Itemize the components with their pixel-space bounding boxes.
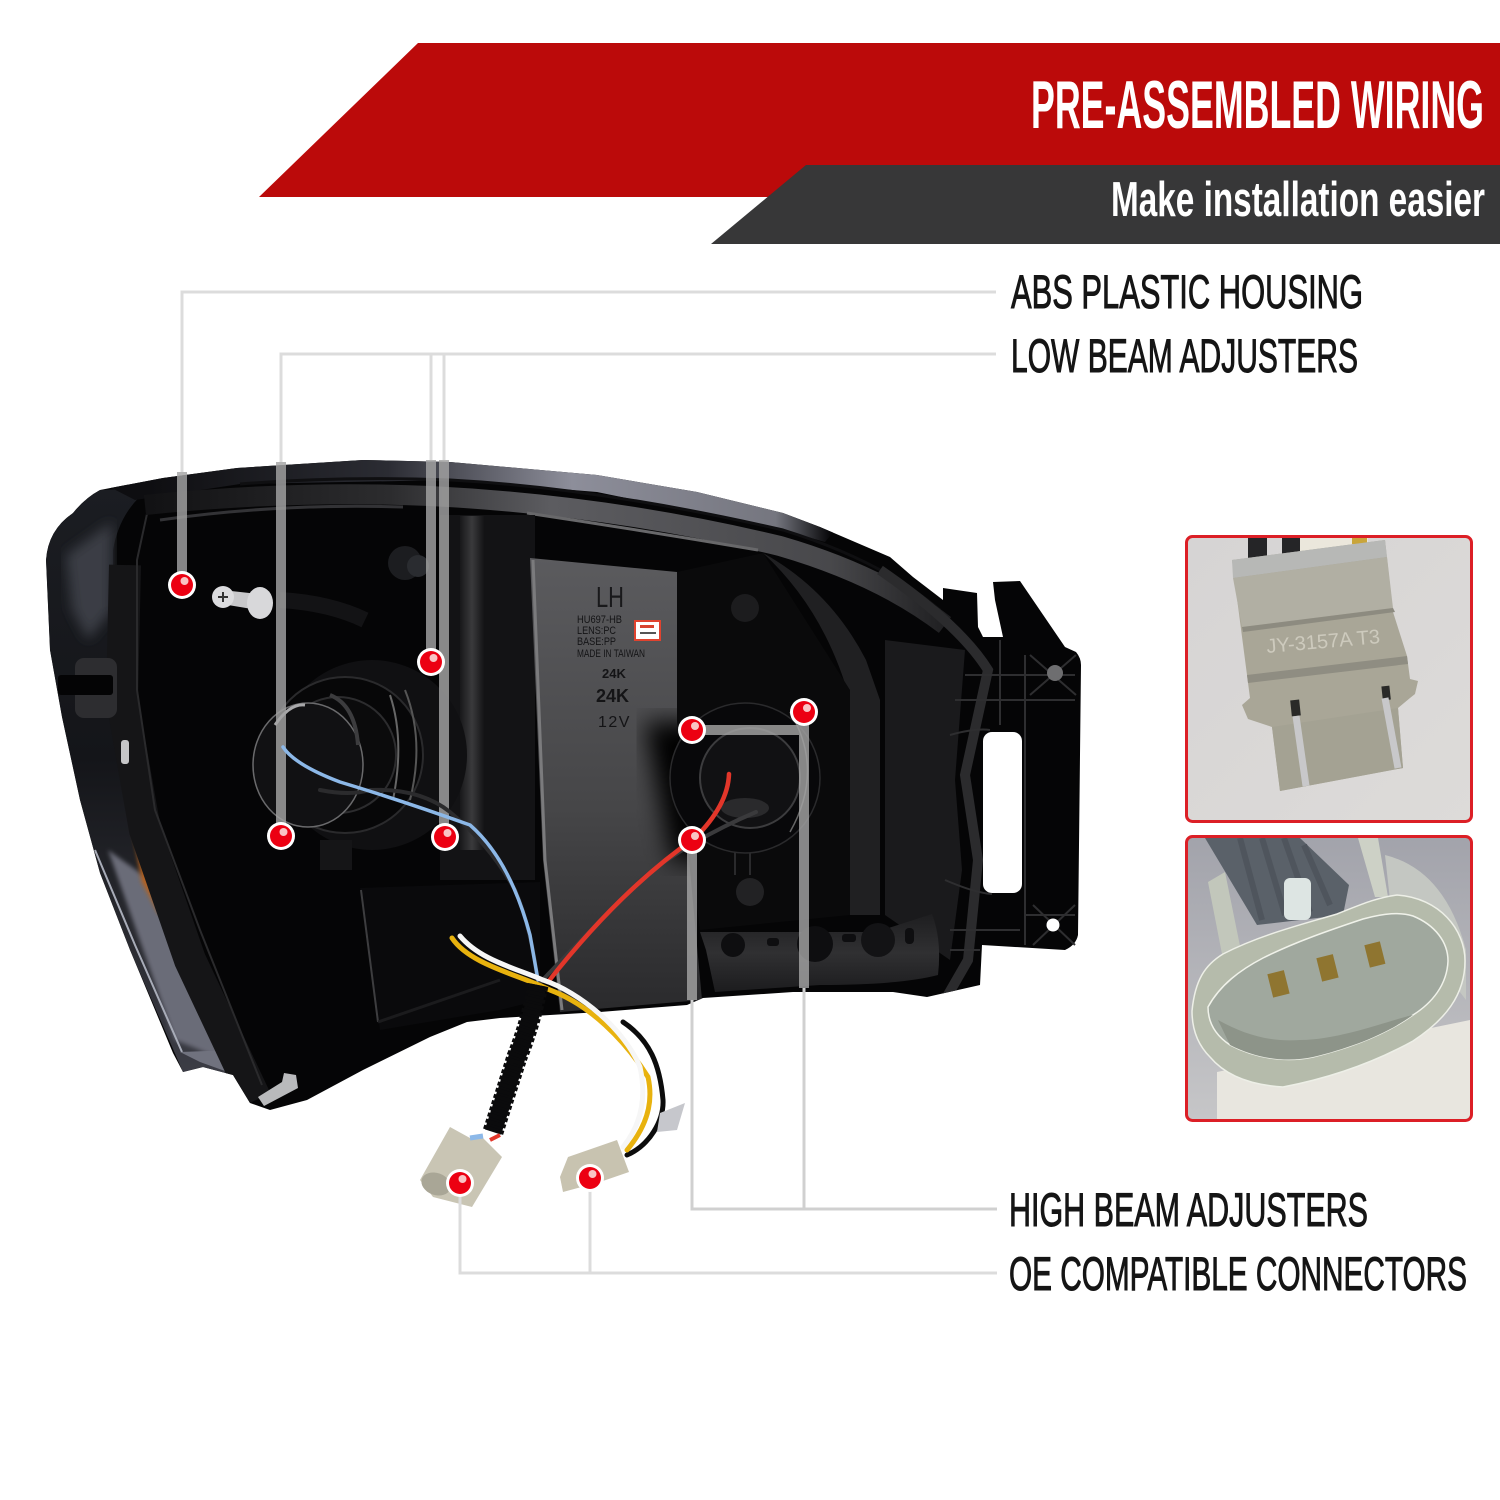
- shaded housing details: [46, 459, 988, 1100]
- line: connectors: [460, 1185, 997, 1273]
- plate marks: 24K: [596, 686, 629, 706]
- plate text: [577, 614, 645, 660]
- plate marks: 24K: [602, 666, 626, 681]
- banner: dark sub-header: [711, 165, 1500, 244]
- plate mark LH: LH: [596, 582, 624, 614]
- bracket hole: [1046, 918, 1060, 932]
- connector right: [560, 1103, 685, 1192]
- bracket ribs: [945, 640, 1076, 950]
- bottom stud: [258, 1073, 298, 1106]
- plate text: HU697-HB: [577, 614, 622, 626]
- headlight assembly photo illustration: [46, 459, 1081, 1207]
- line: abs plastic housing: [182, 292, 996, 472]
- plate text: MADE IN TAIWAN: [577, 648, 645, 660]
- line: high beam adjusters: [692, 988, 997, 1209]
- gold pins: [1267, 941, 1385, 998]
- lens clip: [58, 658, 129, 764]
- plate text: BASE:PP: [577, 636, 616, 648]
- connector left: [418, 1127, 502, 1207]
- housing silhouette: [46, 460, 1081, 1110]
- left bulb socket: [253, 660, 467, 870]
- corrugated wire loom: [493, 985, 538, 1132]
- plate sticker: [635, 621, 660, 640]
- callout lines: [182, 292, 997, 1273]
- socket knobs: [388, 546, 764, 906]
- wires: [283, 747, 756, 1155]
- connector pins: [1296, 698, 1398, 786]
- tray fixtures: [721, 923, 914, 962]
- callout lines wide over housing: [182, 460, 804, 1000]
- marker dots: [168, 571, 818, 1197]
- screw: [212, 586, 365, 620]
- inset photo: three-pin connector: [1186, 836, 1472, 1120]
- plate text: LENS:PC: [577, 625, 616, 637]
- right bulb socket: [670, 703, 820, 853]
- banner: red header: [259, 43, 1500, 197]
- bracket window: [983, 732, 1022, 893]
- inset photo: bulb plug connector: [1186, 536, 1472, 822]
- line: low beam adjusters: [281, 354, 996, 462]
- bracket bolt: [1047, 665, 1063, 681]
- connector model mark: JY-3157A T3: [1266, 626, 1381, 658]
- plate marks: 12V: [598, 714, 631, 731]
- plate marks: [596, 666, 631, 731]
